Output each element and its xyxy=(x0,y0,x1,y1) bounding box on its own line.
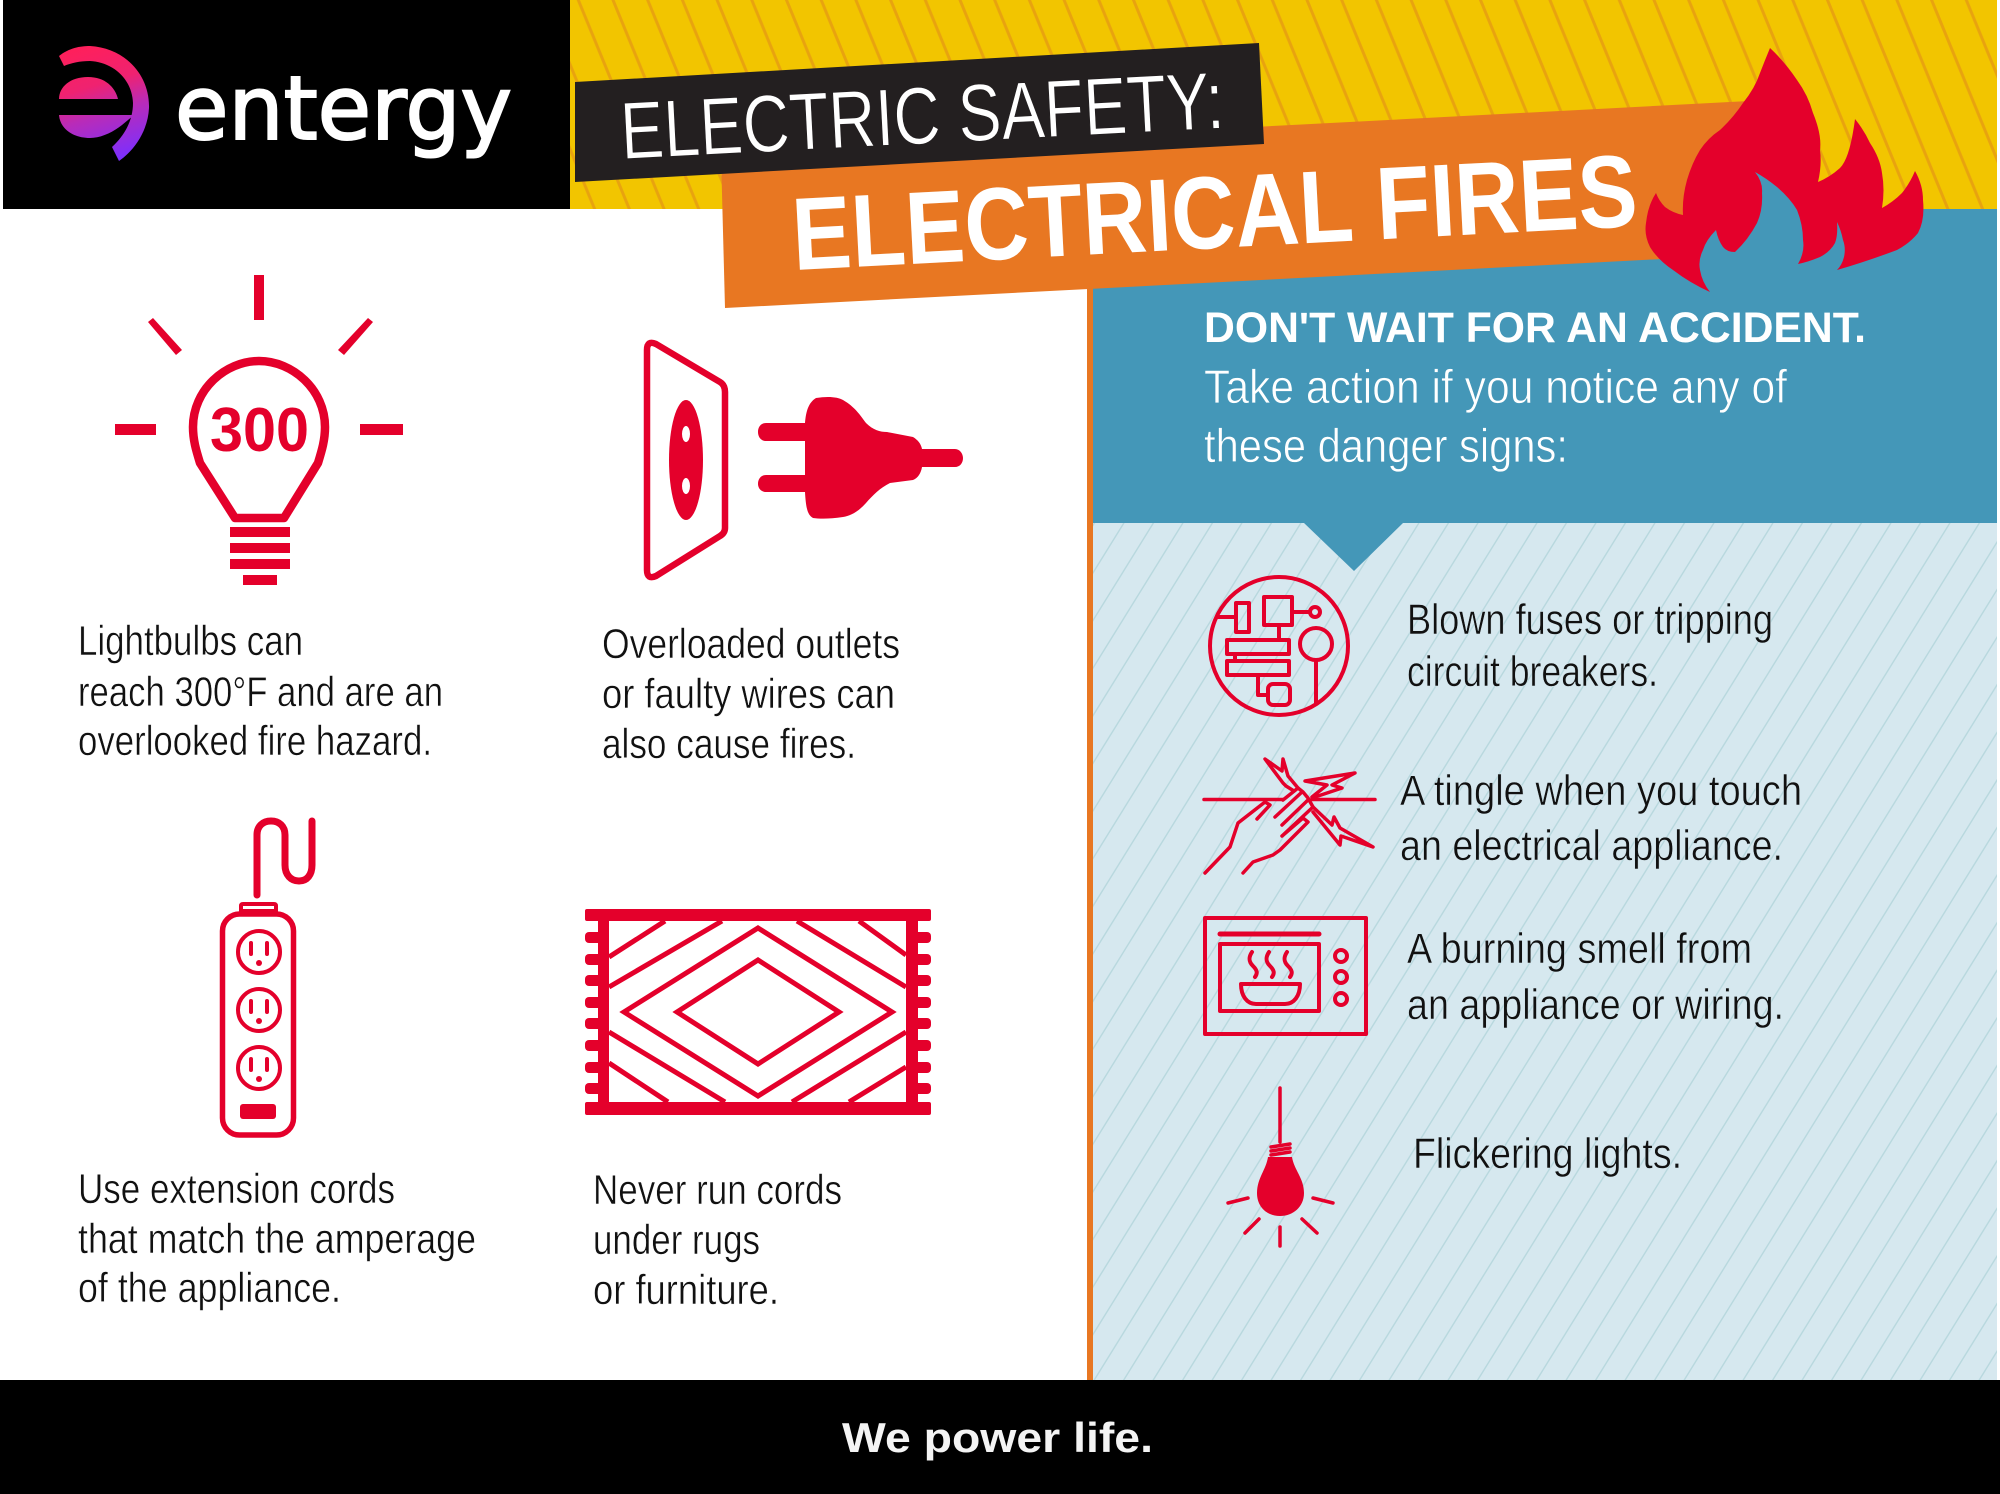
text: blown fuses: circuit breakers. xyxy=(1407,648,1658,696)
logo wordmark: entergy xyxy=(175,57,512,160)
icon: outlet and plug xyxy=(647,343,963,577)
icon: power strip xyxy=(222,821,312,1135)
icon: rug xyxy=(585,909,931,1115)
icon: microwave xyxy=(1205,918,1366,1034)
panel: blue heading block with pointer xyxy=(1093,209,1997,571)
divider: orange vertical bar xyxy=(1087,280,1093,1380)
text: never run cords xyxy=(593,1166,842,1313)
panel text: danger signs intro xyxy=(1204,304,1866,472)
text: take action: these danger signs: xyxy=(1204,419,1568,472)
text: extension cords: of the appliance. xyxy=(78,1264,341,1311)
text: tagline: We power life. xyxy=(842,1414,1153,1461)
text: blown fuses xyxy=(1407,596,1773,696)
text: burning smell: an appliance or wiring. xyxy=(1407,981,1784,1029)
text: lightbulbs: overlooked fire hazard. xyxy=(78,717,432,764)
text: overloaded outlets: Overloaded outlets xyxy=(602,620,900,667)
title banner: black xyxy=(575,43,1264,182)
icon: hand with sparks xyxy=(1204,759,1375,873)
text: never run cords: Never run cords xyxy=(593,1166,842,1213)
text: never run cords: under rugs xyxy=(593,1216,760,1263)
text: take action: Take action if you notice any of xyxy=(1204,360,1788,413)
text: lightbulbs: Lightbulbs can xyxy=(78,617,303,664)
text: tingle: A tingle when you touch xyxy=(1400,767,1802,815)
icon: lightbulb 300: 300 xyxy=(210,396,309,465)
text: extension cords xyxy=(78,1165,476,1311)
text: overloaded outlets: also cause fires. xyxy=(602,720,856,767)
text: never run cords: or furniture. xyxy=(593,1266,779,1313)
footer band xyxy=(0,1380,2000,1494)
icon: entergy logo mark xyxy=(59,46,149,161)
text: blown fuses: Blown fuses or tripping xyxy=(1407,596,1773,644)
text: extension cords: Use extension cords xyxy=(78,1165,395,1212)
text: tingle xyxy=(1400,767,1802,870)
icon: flickering bulb xyxy=(1228,1088,1333,1246)
text: burning smell: A burning smell from xyxy=(1407,925,1752,973)
text: take action xyxy=(1204,360,1788,472)
text: lightbulbs: reach 300°F and are an xyxy=(78,668,443,715)
icon: lightbulb 300 xyxy=(115,275,403,585)
text: lightbulbs xyxy=(78,617,443,764)
heading: electrical fires: ELECTRICAL FIRES xyxy=(789,133,1640,292)
title banner: orange xyxy=(721,101,1749,308)
icon: circuit breaker xyxy=(1210,577,1348,715)
text: burning smell xyxy=(1407,925,1784,1029)
text: overloaded outlets xyxy=(602,620,900,767)
header background: yellow striped band xyxy=(570,0,1997,209)
heading: don't wait: DON'T WAIT FOR AN ACCIDENT. xyxy=(1204,304,1866,352)
text: flickering lights: Flickering lights. xyxy=(1413,1130,1682,1178)
logo block xyxy=(3,0,570,209)
text: tingle: an electrical appliance. xyxy=(1400,822,1783,870)
text: extension cords: that match the amperage xyxy=(78,1215,476,1262)
icon: flame xyxy=(1646,48,1923,292)
heading: electric safety: ELECTRIC SAFETY: xyxy=(618,56,1226,177)
panel: danger signs background xyxy=(1093,523,1997,1380)
text: overloaded outlets: or faulty wires can xyxy=(602,670,895,717)
